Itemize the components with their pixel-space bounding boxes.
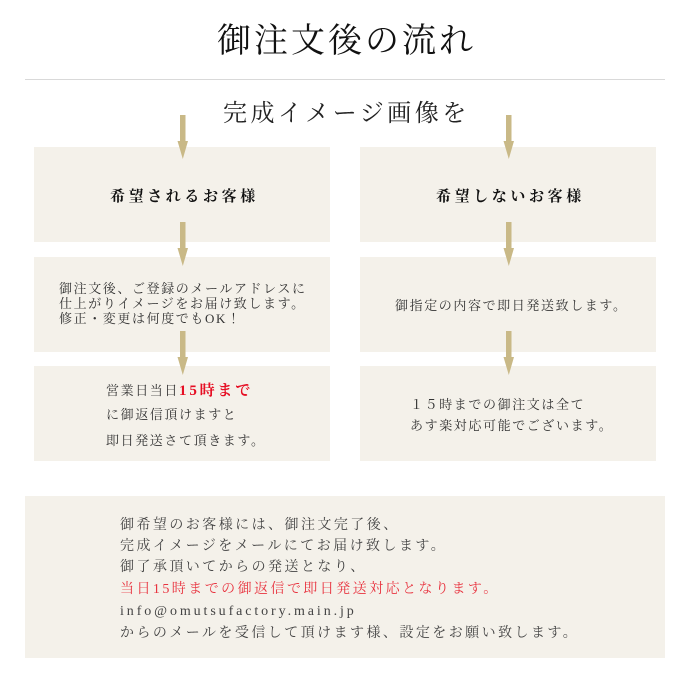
- panel: wanted step 1: 修正・変更は何度でもOK！: [59, 311, 242, 326]
- panel: not wanted step 2: １５時までの御注文は全て: [410, 397, 585, 412]
- note text: からのメールを受信して頂けます様、設定をお願い致します。: [120, 626, 579, 641]
- panel: not wanted step 2: [360, 366, 656, 461]
- title: 御注文後の流れ: [217, 23, 476, 60]
- panel: not wanted step 1: [360, 257, 656, 352]
- panel: not wanted step 1: 御指定の内容で即日発送致します。: [395, 298, 628, 313]
- divider: [25, 79, 665, 80]
- panel: wanted step 1: [34, 257, 330, 352]
- note text: 御希望のお客様には、御注文完了後、: [120, 518, 400, 533]
- note text: info@omutsufactory.main.jp: [120, 604, 357, 619]
- note text: 完成イメージをメールにてお届け致します。: [120, 539, 447, 554]
- subheading: 完成イメージ画像を: [223, 101, 470, 127]
- panel: wanted step 2: 即日発送さて頂きます。: [106, 433, 266, 448]
- panel: wanted step 2: 営業日当日15時まで: [106, 383, 253, 399]
- panel: note: [25, 496, 665, 658]
- note text: 御了承頂いてからの発送となり、: [120, 560, 367, 575]
- panel: not wanted heading: [360, 147, 656, 242]
- panel: wanted step 2: に御返信頂けますと: [106, 407, 237, 422]
- panel: wanted step 1: 御注文後、ご登録のメールアドレスに: [59, 281, 307, 296]
- panel: wanted step 2: [34, 366, 330, 461]
- panel: wanted heading: [34, 147, 330, 242]
- panel: not wanted heading: 希望しないお客様: [436, 189, 585, 205]
- panel: wanted heading: 希望されるお客様: [110, 189, 259, 205]
- note text: [120, 516, 579, 641]
- note text: 当日15時までの御返信で即日発送対応となります。: [120, 582, 500, 597]
- panel: not wanted step 2: あす楽対応可能でございます。: [410, 418, 613, 433]
- panel: wanted step 1: 仕上がりイメージをお届け致します。: [59, 296, 306, 311]
